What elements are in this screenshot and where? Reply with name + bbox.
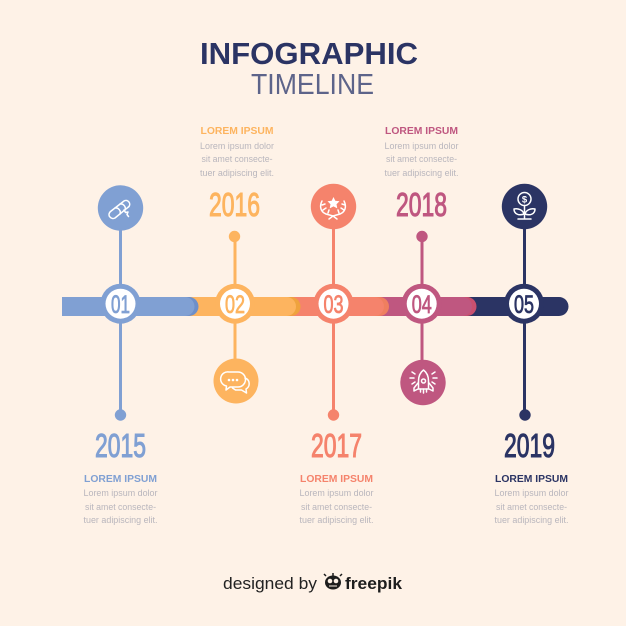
icon: laurel star — [311, 184, 356, 229]
text 2017 — [300, 474, 374, 525]
marker 04 — [402, 284, 442, 324]
step 2015 — [84, 185, 158, 525]
end dot 2016 — [229, 231, 240, 242]
text 2018 — [384, 126, 459, 178]
year 2015: 2015 — [95, 427, 146, 464]
text 2015: Lorem ipsum dolor — [84, 488, 158, 498]
text 2015: tuer adipiscing elit. — [84, 515, 158, 525]
text 2019: LOREM IPSUM — [495, 474, 568, 485]
connector 01 — [119, 208, 122, 415]
text 2015: sit amet consecte- — [85, 502, 156, 512]
marker 03: 03 — [324, 291, 344, 319]
marker 01 — [100, 284, 140, 324]
text 2015: LOREM IPSUM — [84, 474, 157, 485]
text 2019: sit amet consecte- — [496, 502, 567, 512]
title — [200, 36, 418, 101]
text 2018: Lorem ipsum dolor — [384, 141, 459, 151]
step 2019 — [494, 184, 569, 525]
text 2017: Lorem ipsum dolor — [300, 488, 374, 498]
freepik credit: freepik — [345, 574, 403, 593]
connector 05 — [523, 206, 526, 415]
step 2016 — [200, 126, 274, 404]
text 2017: LOREM IPSUM — [300, 474, 373, 485]
text 2015 — [84, 474, 158, 525]
icon: chat — [214, 358, 258, 404]
text 2019 — [494, 474, 569, 525]
text 2019: tuer adipiscing elit. — [494, 515, 568, 525]
end dot 2018 — [416, 231, 428, 242]
connector 04 — [420, 236, 424, 382]
marker 04: 04 — [412, 291, 432, 319]
end dot 2019 — [519, 409, 531, 421]
text 2016: tuer adipiscing elit. — [200, 168, 274, 178]
end dot 2015 — [115, 409, 126, 421]
freepik credit — [223, 573, 403, 593]
text 2016: Lorem ipsum dolor — [200, 141, 274, 151]
connector 03 — [332, 206, 335, 415]
icon: money plant: $ — [522, 194, 528, 206]
title: INFOGRAPHIC — [200, 36, 418, 71]
marker 05 — [504, 284, 544, 324]
text 2018: sit amet consecte- — [386, 154, 457, 164]
marker 05: 05 — [514, 291, 534, 319]
end dot 2017 — [328, 409, 339, 421]
year 2019: 2019 — [504, 427, 555, 464]
freepik credit: designed by — [223, 575, 318, 593]
year 2016: 2016 — [209, 186, 260, 223]
step 2018 — [384, 126, 459, 405]
marker 02: 02 — [225, 291, 245, 319]
text 2016: sit amet consecte- — [202, 154, 273, 164]
marker 02 — [215, 284, 255, 324]
text 2016 — [200, 126, 274, 178]
step 2017 — [300, 184, 374, 525]
icon: freepik mascot — [324, 573, 342, 590]
title: TIMELINE — [251, 69, 374, 101]
icon: diploma — [98, 185, 143, 231]
year 2018: 2018 — [396, 186, 447, 223]
text 2018: LOREM IPSUM — [385, 126, 458, 137]
year 2017: 2017 — [311, 427, 362, 464]
marker 03 — [314, 284, 354, 324]
timeline bar — [62, 297, 568, 316]
text 2017: tuer adipiscing elit. — [300, 515, 374, 525]
text 2019: Lorem ipsum dolor — [494, 488, 569, 498]
icon: rocket — [400, 360, 446, 405]
text 2018: tuer adipiscing elit. — [384, 168, 458, 178]
connector 02 — [234, 236, 236, 381]
marker 01: 01 — [111, 291, 130, 319]
text 2017: sit amet consecte- — [301, 502, 372, 512]
icon: money plant — [502, 184, 547, 229]
text 2016: LOREM IPSUM — [200, 126, 274, 137]
